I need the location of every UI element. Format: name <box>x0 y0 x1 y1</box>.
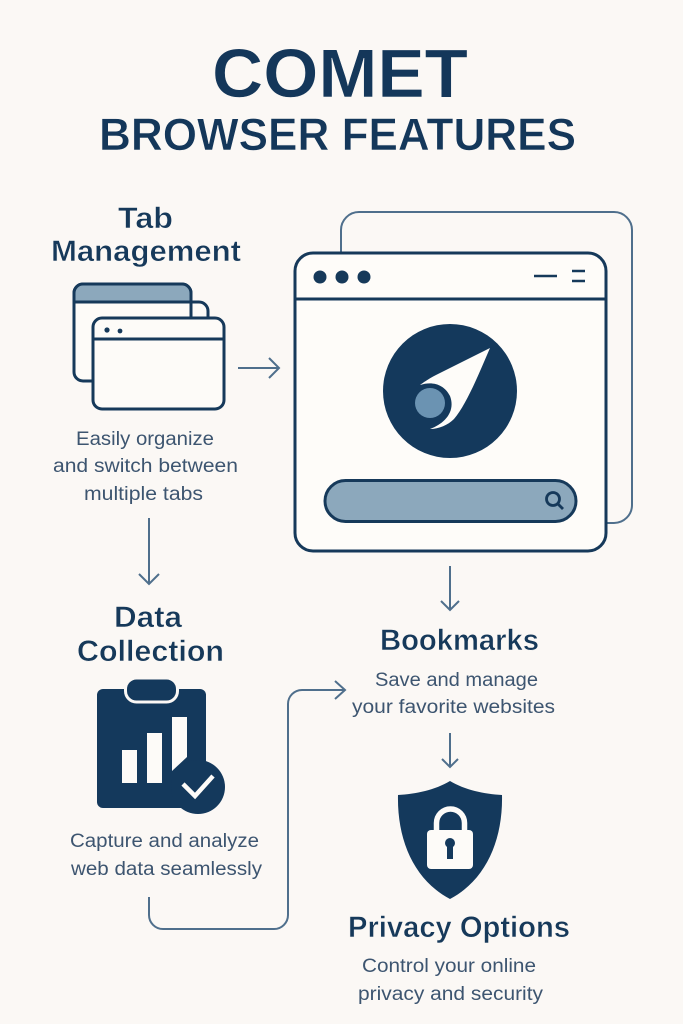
heading: Tab Management <box>51 202 241 268</box>
window control lines <box>534 271 585 281</box>
heading: Data Collection <box>77 601 224 668</box>
icon: comet logo <box>383 324 517 458</box>
text: Data Collection description: web data seamlessly <box>70 859 263 880</box>
title: BROWSER FEATURES <box>99 109 576 160</box>
heading: Bookmarks: Bookmarks <box>380 624 539 657</box>
heading: Privacy Options: Privacy Options <box>348 911 570 944</box>
text: Tab Management description <box>53 429 238 505</box>
icon: clipboard chart <box>97 678 225 814</box>
title: COMET <box>212 35 468 112</box>
arrow: tabs to browser <box>238 358 279 378</box>
arrow: browser to bookmarks <box>441 566 459 610</box>
heading: Tab Management: Management <box>51 235 241 268</box>
text: Privacy Options description: privacy and security <box>358 984 544 1005</box>
panel: browser window <box>295 212 632 551</box>
arrow: tabs to data collection <box>139 518 159 584</box>
front window <box>295 253 606 551</box>
text: Privacy Options description: Control your online <box>362 956 536 977</box>
title <box>99 35 576 160</box>
text: Tab Management description: Easily organize <box>76 429 214 450</box>
heading: Data Collection: Collection <box>77 635 224 668</box>
back window outline <box>341 212 632 523</box>
text: Data Collection description: Capture and analyze <box>70 831 259 852</box>
text: Bookmarks description: your favorite websites <box>352 697 555 718</box>
window control dots <box>314 270 370 284</box>
icon: magnifier <box>546 492 563 509</box>
text: Data Collection description <box>70 831 263 880</box>
text: Tab Management description: and switch between <box>53 456 238 477</box>
text: Tab Management description: multiple tabs <box>84 484 203 505</box>
heading: Tab Management: Tab <box>118 202 173 235</box>
icon: shield with lock <box>398 781 502 899</box>
arrow: data collection to bookmarks <box>149 681 345 929</box>
search bar <box>325 480 576 522</box>
icon: stacked tabs <box>74 284 224 409</box>
text: Privacy Options description <box>358 956 544 1005</box>
text: Bookmarks description <box>352 670 555 718</box>
heading: Data Collection: Data <box>114 601 182 634</box>
text: Bookmarks description: Save and manage <box>375 670 538 691</box>
arrow: bookmarks to privacy <box>442 733 458 767</box>
